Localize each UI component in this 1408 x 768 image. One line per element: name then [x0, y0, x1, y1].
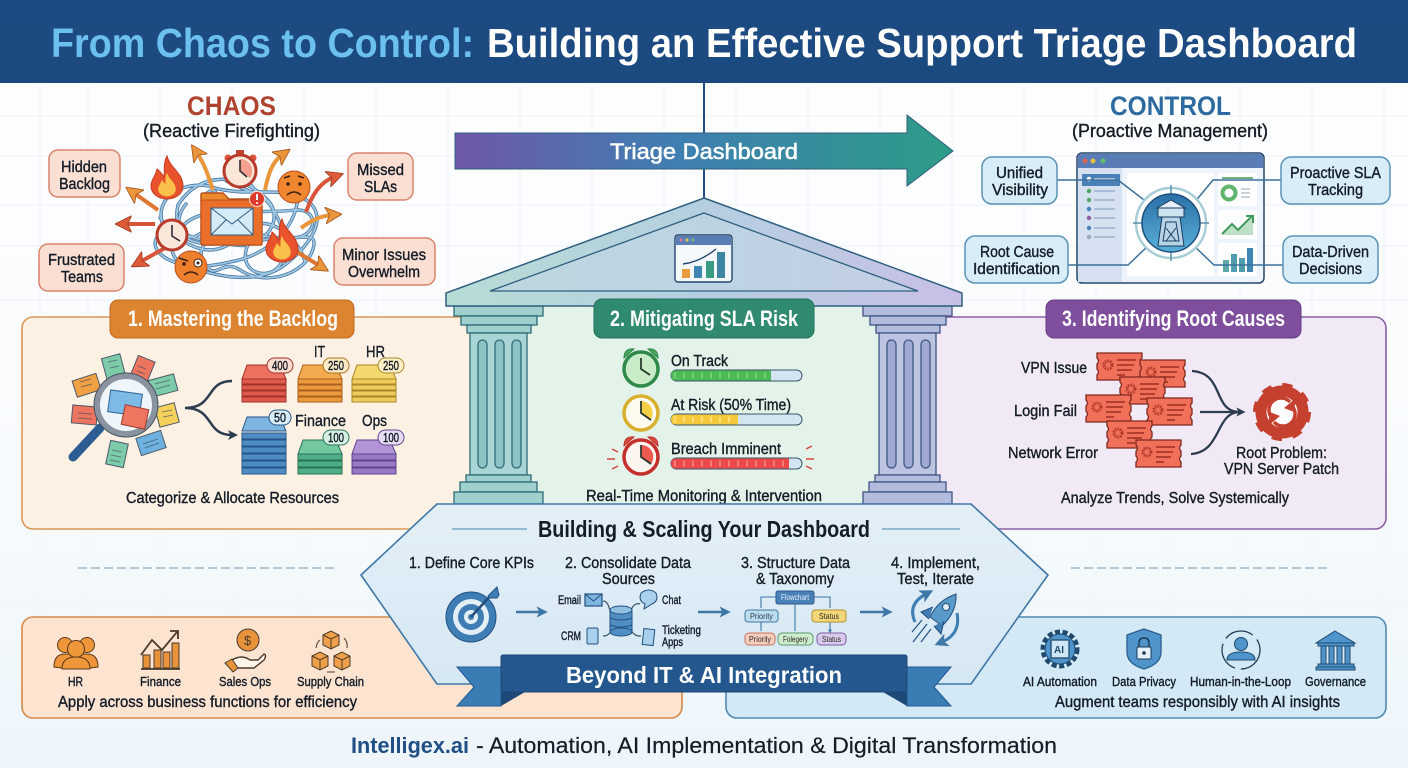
panel: mastering the backlog [22, 300, 502, 529]
icon: flowchart: Folegery [783, 634, 809, 644]
icon: AI chip: AI [1054, 645, 1064, 656]
title banner: Building an Effective Support Triage Dashboard [487, 20, 1357, 66]
status row: on track: On Track [671, 353, 729, 370]
chaos illustration: tangled wires, folder, clocks, faces, flames [125, 150, 334, 283]
icon: sales ops hand and coin [225, 629, 266, 672]
label: human in the loop: Human-in-the-Loop [1190, 674, 1291, 689]
heading tab: mitigating SLA risk [594, 299, 814, 338]
icon: left pillar [454, 306, 543, 504]
heading tab: mastering the backlog: 1. Mastering the Backlog [128, 306, 338, 331]
chaos label: hidden backlog: Backlog [59, 176, 110, 193]
step 2: consolidate data sources: 2. Consolidate Data [565, 555, 691, 572]
caption: apply across: Apply across business functions for efficiency [58, 694, 357, 711]
stack: finance 100 [295, 413, 349, 474]
icon: governance building [1316, 631, 1355, 670]
icon: shield lock [1127, 629, 1161, 669]
icon: human in the loop [1222, 631, 1260, 669]
status row: on track [624, 349, 802, 386]
label: governance: Governance [1305, 674, 1366, 689]
icon: magnifier over tickets [71, 354, 179, 468]
heading: chaos: (Reactive Firefighting) [143, 121, 320, 141]
control illustration: dashboard window with tower [1057, 153, 1283, 283]
chaos label: minor issues overwhelm: Minor Issues [342, 247, 426, 264]
stack: ops 100: Ops [362, 413, 387, 430]
chaos label: missed SLAs: Missed [357, 162, 404, 179]
caption: analyze: Analyze Trends, Solve Systemically [1061, 490, 1289, 507]
stack: blue 50 [242, 410, 291, 474]
arrow: step 2 to 3 [698, 611, 724, 613]
title banner: From Chaos to Control: [51, 20, 474, 66]
panel: identifying root causes [900, 300, 1386, 529]
step 2: consolidate data sources: Ticketing [662, 625, 701, 637]
heading: control: CONTROL [1110, 91, 1231, 121]
step 1: define core KPIs: 1. Define Core KPIs [409, 555, 534, 572]
stack: IT 250: IT [314, 344, 325, 361]
icon: frustrated face [175, 251, 207, 283]
labels: ticket issues: VPN Issue [1021, 360, 1087, 377]
control label: proactive SLA tracking: Tracking [1308, 182, 1363, 199]
panel: mitigating SLA risk [446, 198, 962, 510]
icon: flowchart: Status [819, 611, 839, 621]
icon: flowchart: Priorily [749, 634, 772, 644]
chaos label: hidden backlog: Hidden [61, 159, 107, 176]
chaos label: hidden backlog [49, 150, 120, 197]
panel: beyond IT functions [22, 617, 682, 718]
heading: chaos [143, 91, 320, 141]
icon: sales ops hand and coin: $ [244, 633, 252, 648]
ribbon: beyond IT and AI integration: Beyond IT & AI Integration [566, 662, 842, 688]
label: supply chain: Supply Chain [297, 674, 364, 689]
labels: ticket issues: Login Fail [1014, 403, 1077, 420]
stack: IT 250 [298, 344, 349, 402]
chaos label: minor issues overwhelm [334, 238, 435, 285]
icon: ticket cluster [1086, 353, 1192, 467]
caption: categorize: Categorize & Allocate Resources [126, 490, 339, 507]
control label: data-driven decisions: Data-Driven [1292, 244, 1369, 261]
chaos label: minor issues overwhelm: Overwhelm [348, 264, 420, 281]
chaos label: frustrated teams: Teams [61, 269, 103, 286]
arrow: split to categories [185, 381, 232, 435]
icon: flowchart: Priority [750, 611, 774, 621]
control label: unified visibility [982, 157, 1057, 204]
arrow: triage dashboard [455, 115, 953, 186]
heading: control [1072, 91, 1268, 141]
label: finance: Finance [140, 674, 181, 689]
icon: stopwatch [224, 150, 256, 187]
step 4: implement test iterate: Test, Iterate [897, 571, 974, 588]
icon: flowchart: Status [822, 634, 841, 644]
step 4: implement test iterate: 4. Implement, [891, 555, 980, 572]
heading: chaos: CHAOS [187, 91, 276, 121]
stack: blue 50: 50 [274, 411, 286, 425]
icon: gear root problem [1256, 386, 1308, 438]
icon: HR people [54, 638, 98, 669]
step 2: consolidate data sources: Sources [602, 571, 655, 588]
icon: rocket with cycle [912, 594, 958, 642]
icon: flowchart [745, 591, 846, 645]
stack: ops 100: 100 [383, 431, 399, 445]
label: data privacy: Data Privacy [1112, 674, 1176, 689]
labels: ticket issues: Network Error [1008, 445, 1099, 462]
icon: chart window [675, 235, 732, 282]
control label: data-driven decisions: Decisions [1299, 261, 1362, 278]
panel: building and scaling dashboard [361, 504, 1048, 684]
icon: flowchart: Flowchart [781, 592, 809, 602]
caption: augment teams: Augment teams responsibly with AI insights [1055, 694, 1340, 711]
stack: finance 100: 100 [328, 431, 344, 445]
arrows: converge to root problem [1191, 371, 1240, 454]
stack: IT 250: 250 [328, 359, 344, 373]
heading: building and scaling: Building & Scaling Your Dashboard [538, 516, 870, 542]
chaos label: missed SLAs [348, 153, 413, 200]
icon: data sources to database [585, 590, 657, 646]
footer: Intelligex.ai [351, 733, 469, 758]
label: sales ops: Sales Ops [219, 674, 271, 689]
arrow: step 3 to 4 [860, 611, 886, 613]
chaos label: missed SLAs: SLAs [364, 179, 397, 196]
footer: - Automation, AI Implementation & Digital Transformation [476, 733, 1057, 758]
icon: supply chain boxes [312, 631, 350, 672]
status row: at risk: At Risk (50% Time) [671, 397, 791, 414]
control label: proactive SLA tracking: Proactive SLA [1290, 165, 1381, 182]
label: AI automation: AI Automation [1023, 674, 1097, 689]
stack: HR 250 [352, 344, 404, 402]
step 2: consolidate data sources: Apps [662, 637, 683, 649]
stack: red 400 [242, 358, 293, 402]
text: root problem: VPN Server Patch [1224, 461, 1339, 478]
stack: HR 250: 250 [383, 359, 399, 373]
panel: AI integration [726, 617, 1386, 718]
status row: at risk [624, 396, 802, 430]
heading tab: identifying root causes: 3. Identifying Root Causes [1062, 306, 1285, 331]
stack: finance 100: Finance [295, 413, 346, 430]
icon: AI chip [1043, 632, 1077, 666]
icon: worried face [278, 171, 310, 203]
step 3: structure data and taxonomy: & Taxonomy [756, 571, 834, 588]
labels: ticket issues [1008, 360, 1099, 462]
stack: HR 250: HR [366, 344, 385, 361]
arrow: triage dashboard: Triage Dashboard [610, 139, 798, 164]
control label: root cause identification: Root Cause [980, 244, 1054, 261]
step 2: consolidate data sources: Chat [662, 595, 682, 607]
step 2: consolidate data sources: CRM [561, 631, 581, 643]
step 3: structure data and taxonomy [741, 555, 850, 645]
title banner [0, 0, 1408, 83]
icon: right pillar [863, 306, 952, 504]
step 1: define core KPIs [409, 555, 534, 642]
icon: flame left [151, 156, 183, 199]
chaos label: frustrated teams [39, 244, 124, 291]
text: root problem [1224, 445, 1339, 478]
control label: data-driven decisions [1283, 236, 1378, 283]
heading tab: mitigating SLA risk: 2. Mitigating SLA Risk [610, 306, 799, 331]
control label: root cause identification [965, 236, 1068, 283]
icon: control tower [1157, 200, 1185, 246]
status row: breach imminent: Breach Imminent [671, 441, 782, 458]
stack: red 400: 400 [272, 359, 288, 373]
chaos label: frustrated teams: Frustrated [48, 252, 115, 269]
heading: control: (Proactive Management) [1072, 121, 1268, 141]
step 2: consolidate data sources [558, 555, 701, 649]
heading tab: identifying root causes [1046, 300, 1301, 338]
stack: ops 100 [352, 413, 404, 474]
icon: finance chart [141, 631, 180, 669]
ribbon: beyond IT and AI integration [457, 655, 951, 706]
heading tab: mastering the backlog [110, 300, 354, 338]
icon: flame right [266, 219, 298, 262]
icon: email folder [201, 192, 264, 245]
step 2: consolidate data sources: Email [558, 595, 581, 607]
step 4: implement test iterate [891, 555, 980, 642]
caption: real-time monitoring: Real-Time Monitoring & Intervention [586, 488, 822, 505]
step 3: structure data and taxonomy: 3. Structure Data [741, 555, 850, 572]
status row: breach imminent [607, 437, 814, 474]
icon: pediment roof [446, 198, 962, 306]
arrow: step 1 to 2 [516, 611, 541, 613]
control label: unified visibility: Unified [996, 165, 1043, 182]
label: HR: HR [68, 674, 83, 689]
control label: root cause identification: Identification [973, 261, 1060, 278]
icon: target [446, 587, 499, 642]
control label: unified visibility: Visibility [992, 182, 1048, 199]
icon: clock [157, 220, 187, 250]
control label: proactive SLA tracking [1281, 157, 1390, 204]
text: root problem: Root Problem: [1236, 445, 1327, 462]
